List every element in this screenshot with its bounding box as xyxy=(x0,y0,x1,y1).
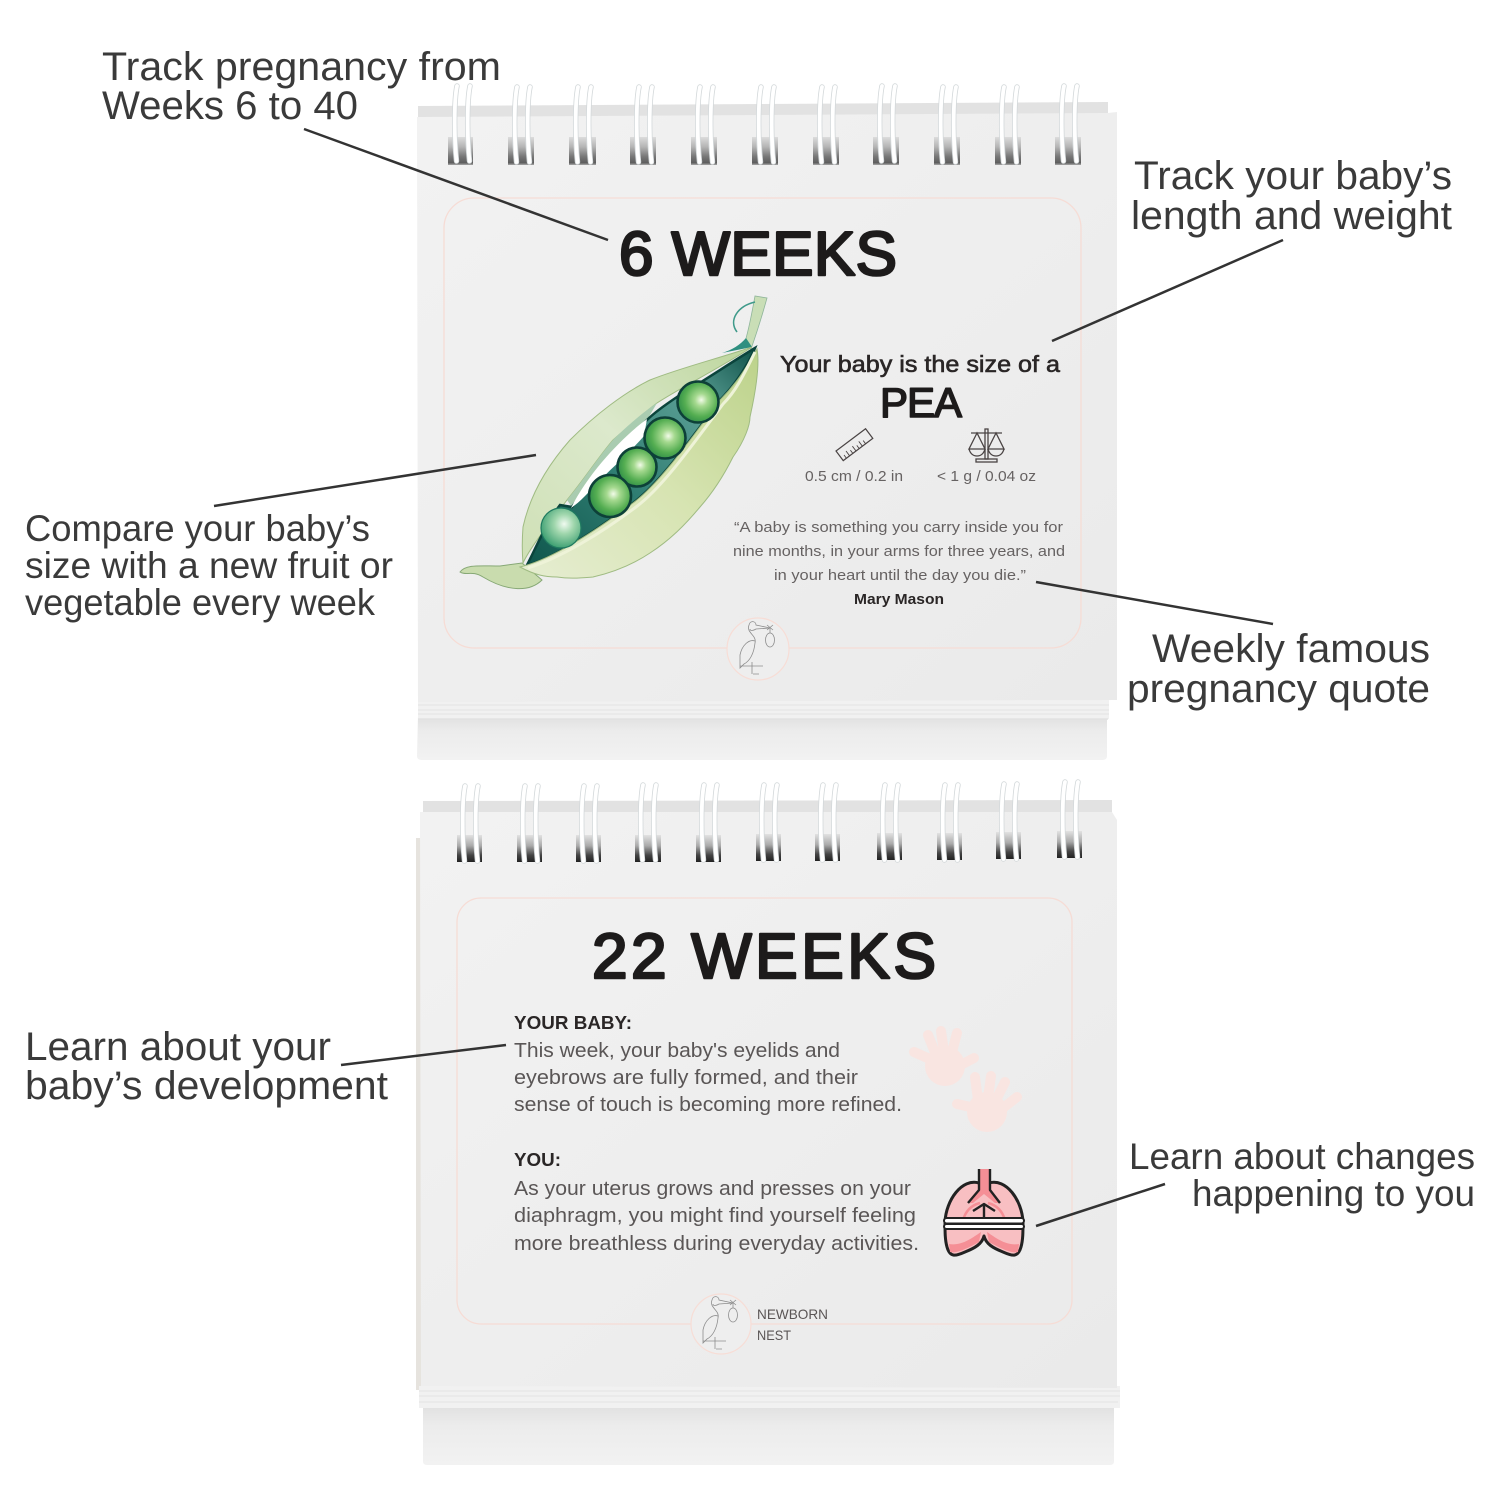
brand name: NEWBORN xyxy=(757,1306,828,1322)
text block: your baby: YOUR BABY: xyxy=(514,1013,632,1033)
callout: compare size: size with a new fruit or xyxy=(25,545,393,586)
callout: weekly quote xyxy=(1036,582,1430,711)
callout: baby development: baby’s development xyxy=(25,1064,388,1108)
callout: track pregnancy xyxy=(102,45,608,240)
text: size comparison: Your baby is the size of a xyxy=(780,351,1060,377)
front page xyxy=(417,112,1117,702)
callout: changes to you: Learn about changes xyxy=(1129,1136,1475,1177)
text block: your baby: sense of touch is becoming more refined. xyxy=(514,1094,902,1116)
callout: track pregnancy: Weeks 6 to 40 xyxy=(102,84,358,128)
peas xyxy=(541,382,718,548)
card: 6 weeks calendar xyxy=(417,86,1117,760)
page stack xyxy=(418,700,1109,719)
icon: weighing scale xyxy=(969,429,1004,462)
front page xyxy=(420,812,1117,1388)
text block: you: more breathless during everyday activities. xyxy=(514,1233,919,1255)
callout: weekly quote: Weekly famous xyxy=(1152,627,1430,671)
quote: “A baby is something you carry inside you for xyxy=(734,519,1063,536)
text block: your baby: This week, your baby's eyelids and xyxy=(514,1040,840,1062)
callout: weekly quote: pregnancy quote xyxy=(1127,667,1430,711)
callout: length and weight: Track your baby’s xyxy=(1134,154,1452,198)
brand name xyxy=(757,1306,828,1343)
spiral rings xyxy=(455,86,1077,162)
callout: compare size: Compare your baby’s xyxy=(25,508,370,549)
text: PEA: PEA xyxy=(880,379,962,426)
base stand xyxy=(417,716,1107,760)
callout: baby development xyxy=(25,1025,506,1108)
quote: nine months, in your arms for three years, and xyxy=(733,543,1065,560)
quote author: Mary Mason xyxy=(854,591,944,608)
card: 22 weeks calendar xyxy=(416,782,1120,1465)
icon: ruler xyxy=(836,429,873,461)
left cover edge xyxy=(416,838,421,1390)
page border frame xyxy=(444,198,1081,648)
text block: your baby xyxy=(514,1013,902,1116)
icon: lungs xyxy=(944,1169,1024,1255)
text block: you: As your uterus grows and presses on your xyxy=(514,1178,911,1200)
callout: track pregnancy: Track pregnancy from xyxy=(102,45,501,89)
callout: changes to you xyxy=(1036,1136,1475,1226)
text block: you: diaphragm, you might find yourself feeling xyxy=(514,1205,916,1227)
text block: your baby: eyebrows are fully formed, and their xyxy=(514,1067,858,1089)
callout: length and weight xyxy=(1052,154,1452,341)
callout: baby development: Learn about your xyxy=(25,1025,331,1069)
callout: compare size xyxy=(25,455,536,623)
text: length: 0.5 cm / 0.2 in xyxy=(805,468,903,485)
white gap between pod halves xyxy=(571,419,647,508)
page border frame xyxy=(457,898,1072,1324)
text block: you: YOU: xyxy=(514,1150,561,1170)
binding slots xyxy=(457,831,1082,862)
rear page strip xyxy=(418,102,1108,118)
logo: stork xyxy=(727,618,789,680)
text: size comparison xyxy=(780,351,1060,426)
heading: 22 weeks: 22 WEEKS xyxy=(592,920,936,992)
spiral rings xyxy=(463,782,1078,861)
binding slots xyxy=(448,137,1081,165)
quote: in your heart until the day you die.” xyxy=(774,567,1026,584)
page stack xyxy=(419,1386,1120,1408)
base stand xyxy=(423,1405,1114,1465)
quote xyxy=(733,519,1065,608)
callout: compare size: vegetable every week xyxy=(25,582,375,623)
rear page strip xyxy=(423,800,1112,812)
text: weight: < 1 g / 0.04 oz xyxy=(937,468,1036,485)
heading: 6 weeks: 6 WEEKS xyxy=(619,220,897,289)
illustration: pea pod xyxy=(460,296,767,589)
text block: you xyxy=(514,1150,919,1255)
icon: baby hands xyxy=(914,1031,1017,1132)
callout: length and weight: length and weight xyxy=(1131,194,1452,238)
logo: stork xyxy=(691,1294,751,1354)
callout: changes to you: happening to you xyxy=(1192,1173,1475,1214)
brand name: NEST xyxy=(757,1327,791,1343)
